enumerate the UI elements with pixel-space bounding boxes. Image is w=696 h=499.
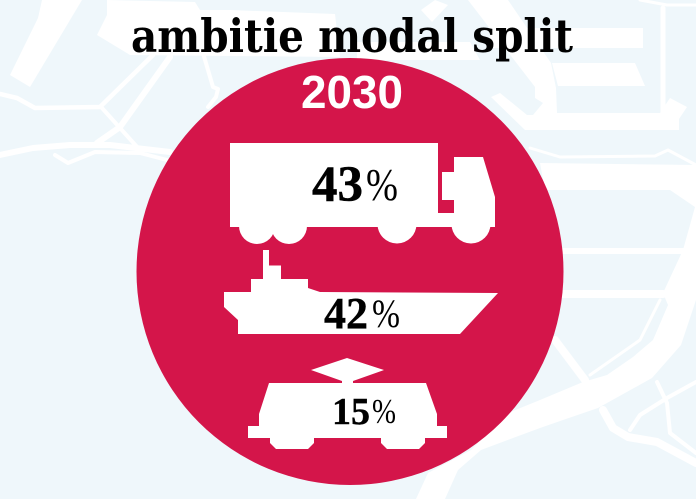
ship percentage: %	[372, 291, 400, 336]
train percentage: %	[372, 392, 396, 431]
icon: truck	[230, 143, 495, 244]
ship group	[224, 250, 498, 338]
train percentage: 15	[332, 391, 370, 433]
ship percentage: 42	[324, 289, 368, 338]
truck percentage: %	[366, 159, 398, 210]
train group	[248, 358, 447, 449]
title: ambitie modal split	[131, 9, 574, 63]
truck percentage: 43	[312, 157, 363, 213]
year: 2030	[301, 66, 403, 118]
icon: train	[248, 358, 447, 449]
icon: ship	[224, 250, 498, 334]
red circle	[136, 58, 564, 485]
truck group	[230, 143, 495, 244]
